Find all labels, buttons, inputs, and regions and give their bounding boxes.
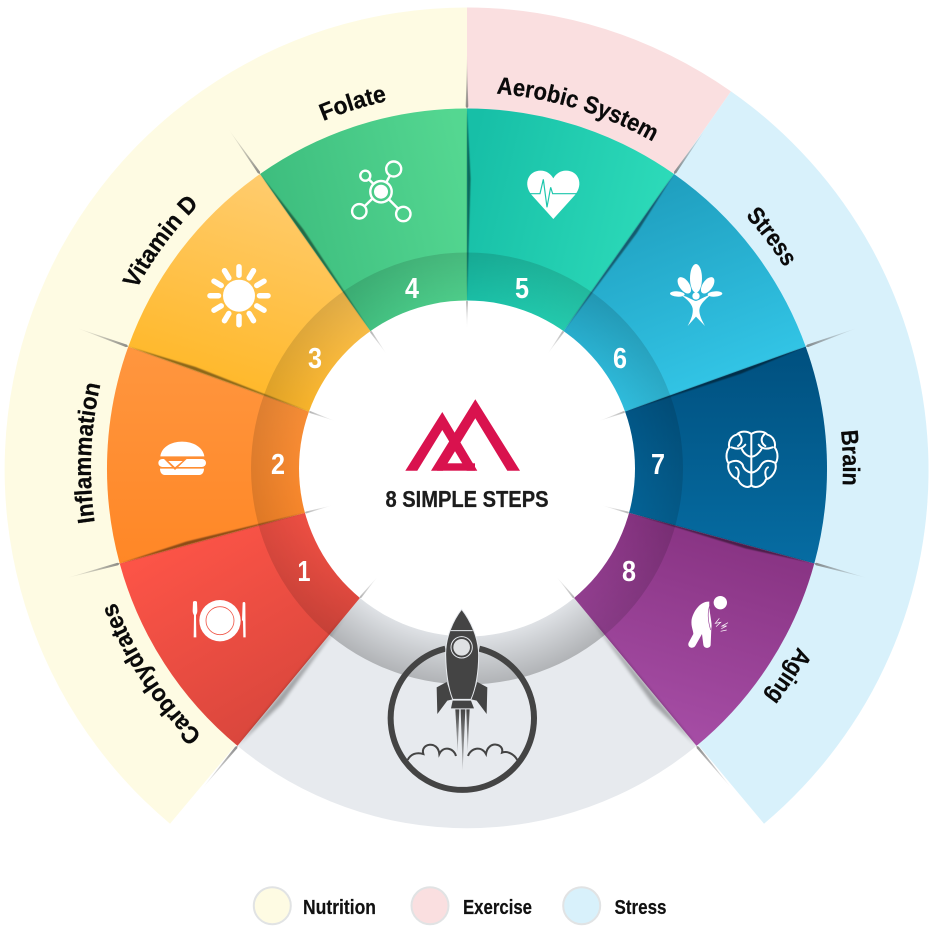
step numbers: 7 xyxy=(651,449,665,481)
legend nutrition xyxy=(254,887,376,924)
label aerobic system: Aerobic System xyxy=(496,78,657,142)
rocket fins xyxy=(437,682,487,714)
center white circle xyxy=(299,300,635,636)
label aging: Aging xyxy=(764,647,810,704)
rocket body xyxy=(446,609,479,699)
wedge 6 stress xyxy=(467,174,806,468)
legend exercise: Exercise xyxy=(463,897,532,919)
curved wedge labels xyxy=(74,78,860,744)
legend xyxy=(254,887,666,924)
label vitamin D: Vitamin D xyxy=(122,196,196,284)
step numbers: 6 xyxy=(613,343,627,375)
logo mountains xyxy=(405,399,520,471)
wedge 2 inflammation xyxy=(107,347,467,564)
icon: plate and cutlery xyxy=(193,600,246,641)
stress background sector xyxy=(467,91,929,824)
wedge 4 folate xyxy=(260,108,467,468)
label folate: Folate xyxy=(318,89,386,121)
legend exercise xyxy=(412,887,532,924)
rocket flames xyxy=(455,709,470,771)
icon: sun xyxy=(210,267,268,325)
step numbers: 2 xyxy=(271,449,285,481)
step numbers: 5 xyxy=(515,273,529,305)
icon: heart with pulse xyxy=(527,171,579,219)
wedge 3 vitamin D xyxy=(128,174,467,468)
label brain: Brain xyxy=(841,430,860,484)
wedge shadows xyxy=(66,54,868,793)
nutrition background sector xyxy=(5,7,467,824)
rocket porthole xyxy=(451,637,472,658)
wedge 1 carbohydrates xyxy=(120,468,467,746)
step numbers: 1 xyxy=(298,556,310,588)
step numbers: 4 xyxy=(405,273,419,305)
inner number ring xyxy=(251,252,683,684)
center title: 8 SIMPLE STEPS xyxy=(386,486,548,512)
label stress: Stress xyxy=(748,207,794,266)
icon: molecule xyxy=(352,162,410,221)
launch sector xyxy=(238,468,696,828)
wedge 7 brain xyxy=(467,347,827,564)
legend stress xyxy=(563,887,666,924)
icon: brain xyxy=(726,432,777,487)
step numbers xyxy=(271,273,665,588)
label inflammation: Inflammation xyxy=(74,384,100,524)
wedge 8 aging xyxy=(467,468,814,746)
label carbohydrates: Carbohydrates xyxy=(105,604,198,744)
exercise background sector xyxy=(467,8,731,468)
rocket circle xyxy=(391,649,534,790)
legend stress: Stress xyxy=(614,897,666,919)
icon: aching bent person xyxy=(688,596,728,648)
rocket illustration xyxy=(391,609,534,790)
legend nutrition: Nutrition xyxy=(303,897,376,919)
icon: tree person xyxy=(670,264,722,326)
step numbers: 8 xyxy=(622,556,636,588)
icon: burger xyxy=(158,442,206,475)
step numbers: 3 xyxy=(308,343,322,375)
rocket clouds xyxy=(408,745,517,760)
rocket nozzle xyxy=(451,701,474,708)
wedge 5 aerobic system xyxy=(467,108,674,468)
launch ring shading xyxy=(251,252,683,684)
